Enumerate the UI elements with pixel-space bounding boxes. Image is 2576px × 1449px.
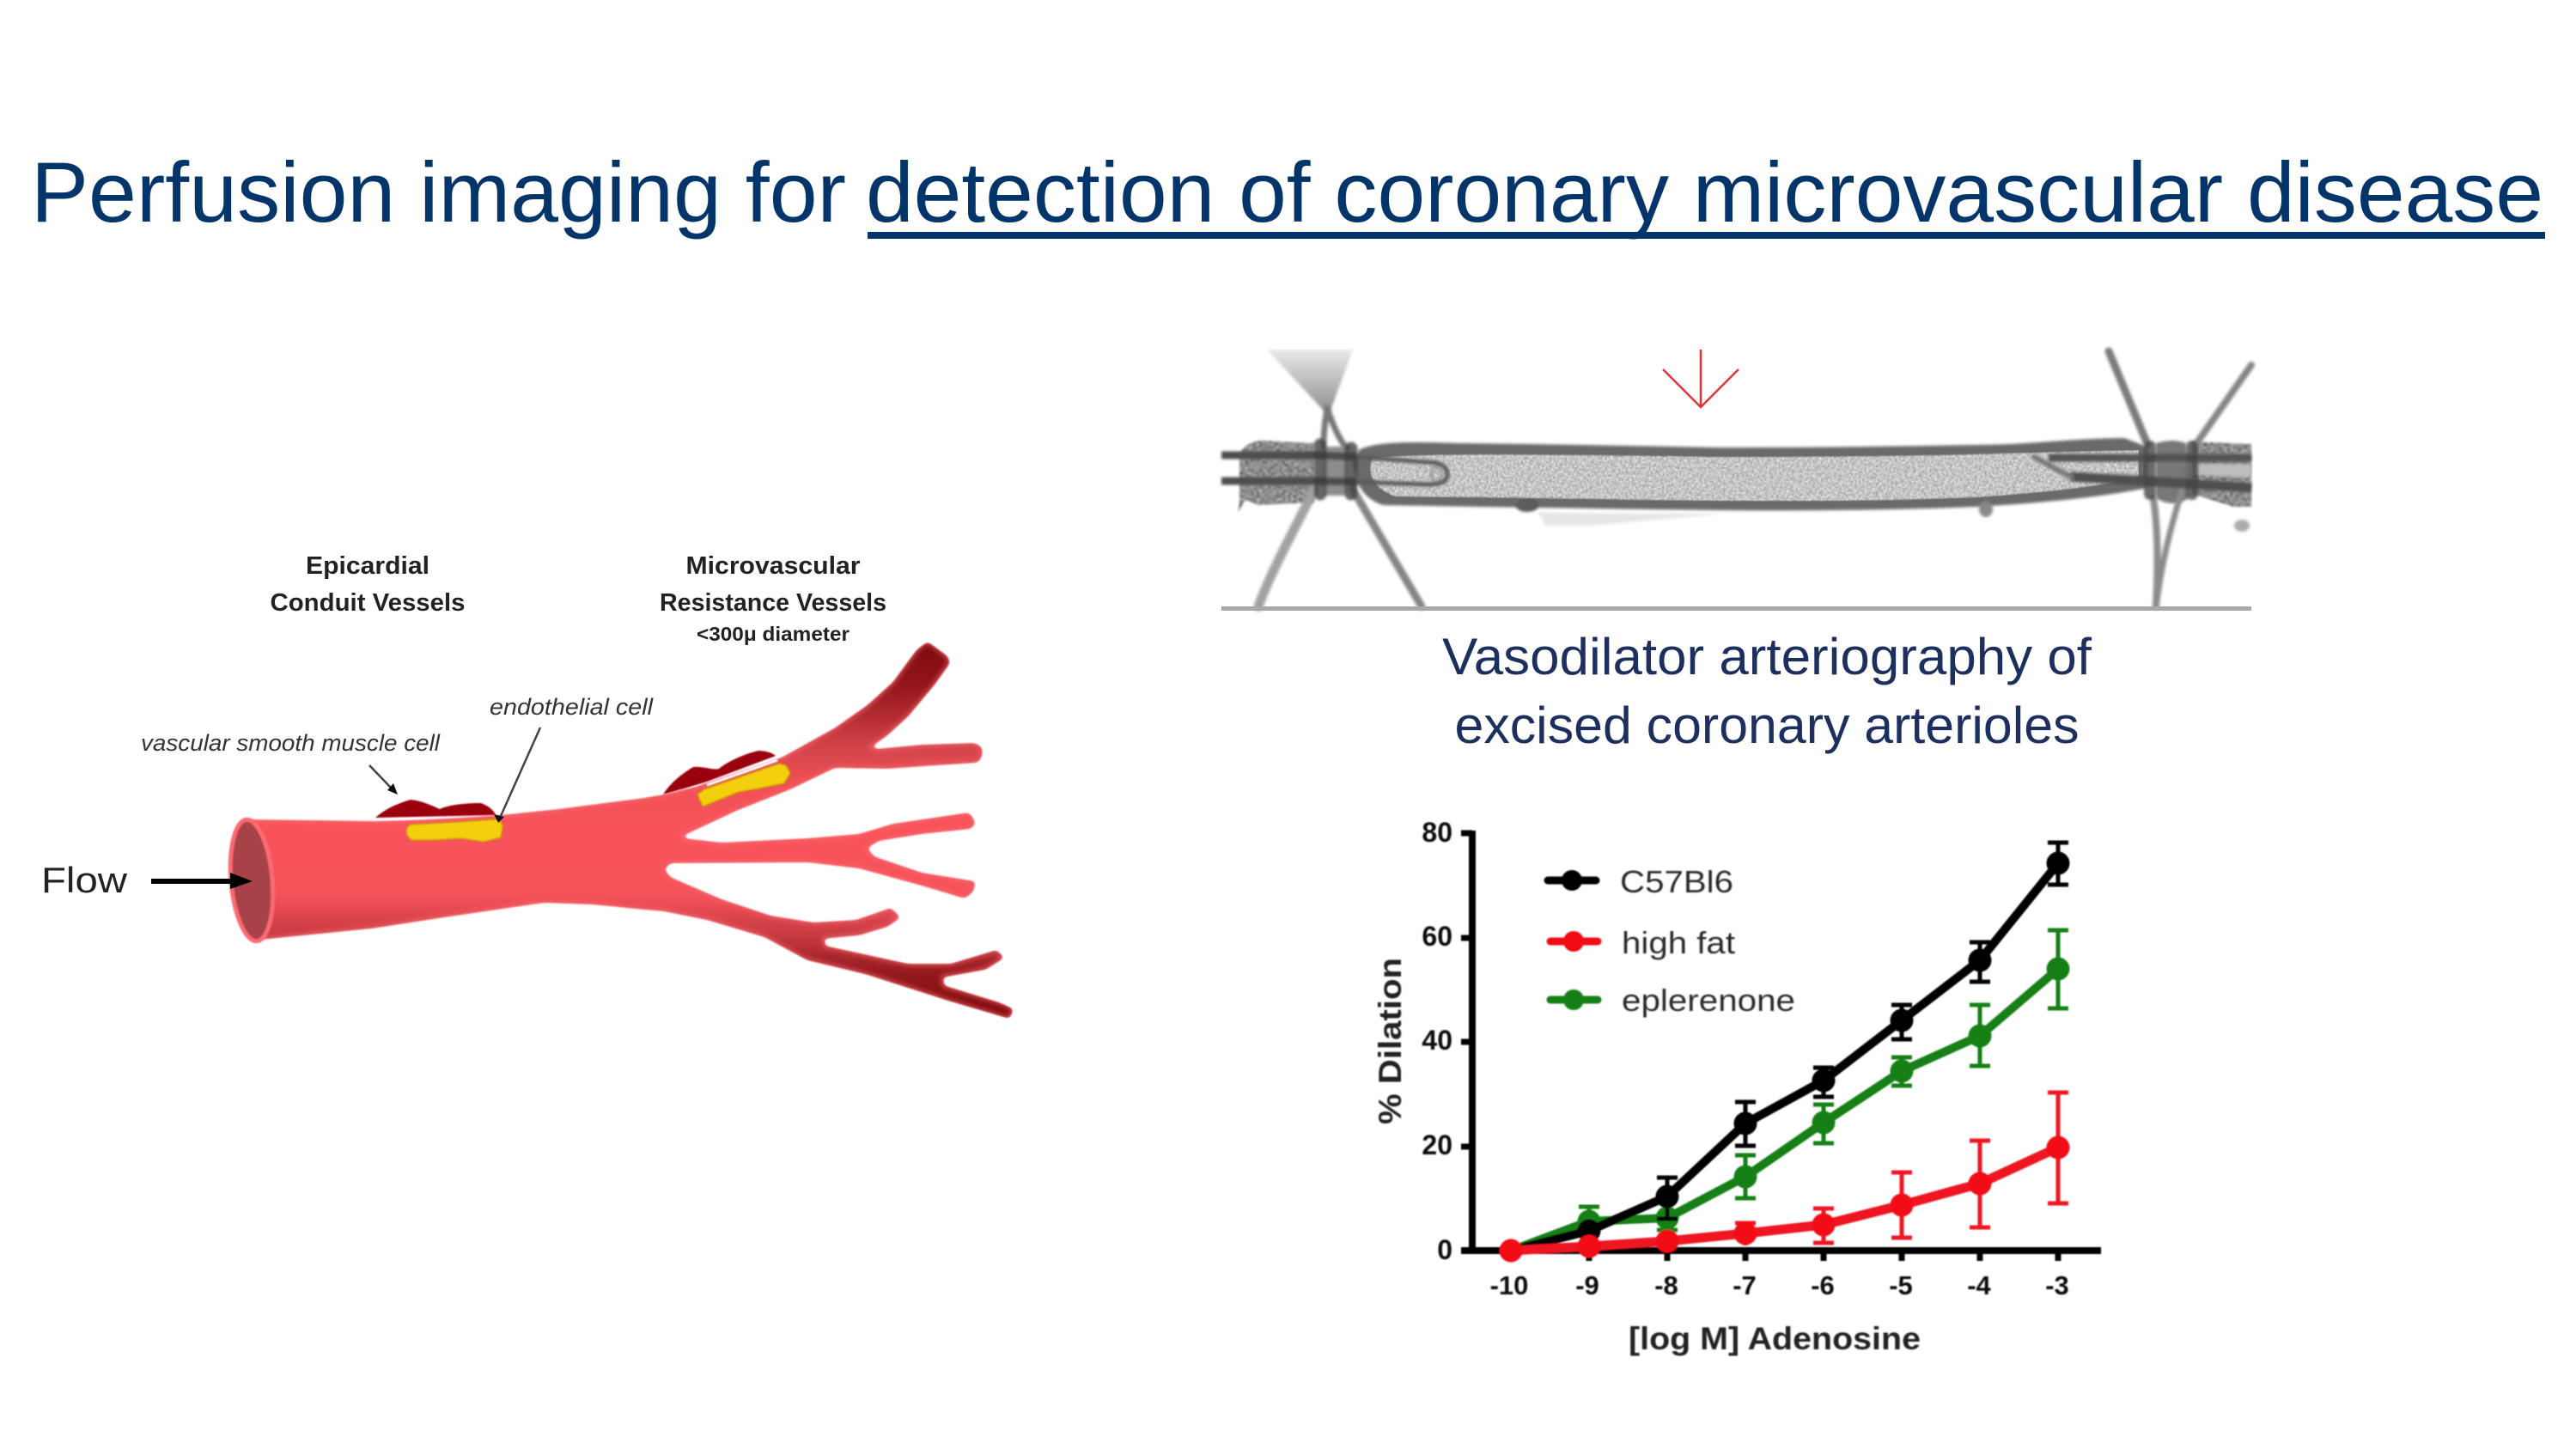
label: microvascular resistance vessels: <300μ diameter xyxy=(697,623,850,645)
vessel illustration xyxy=(226,642,1013,1018)
y tick labels: 80 xyxy=(1422,817,1452,848)
title: detection of coronary microvascular disease xyxy=(866,144,2543,240)
y tick labels: 40 xyxy=(1422,1025,1452,1056)
x tick labels: -4 xyxy=(1967,1270,1992,1300)
arrow: endothelial cell pointer xyxy=(494,728,540,823)
title: Perfusion imaging for xyxy=(31,144,846,240)
thread funnel xyxy=(1267,350,1353,411)
x tick labels: -7 xyxy=(1733,1270,1757,1300)
sutures and cannulas xyxy=(1221,351,2251,606)
label: epicardial conduit vessels: Epicardial xyxy=(306,552,429,580)
label: microvascular resistance vessels: Resistance Vessels xyxy=(660,589,886,617)
y axis title: % Dilation xyxy=(1373,958,1408,1124)
y tick labels: 0 xyxy=(1437,1234,1452,1265)
x axis title: [log M] Adenosine xyxy=(1629,1321,1921,1356)
vessel diagram xyxy=(41,552,1013,1018)
label: endothelial cell: endothelial cell xyxy=(490,694,654,720)
vessel mouth xyxy=(226,818,277,943)
series: eplerenone xyxy=(1511,930,2070,1251)
right cuff xyxy=(2192,441,2251,507)
x tick labels: -9 xyxy=(1575,1270,1599,1300)
x tick labels: -8 xyxy=(1654,1270,1678,1300)
label: epicardial conduit vessels xyxy=(270,552,466,617)
endothelial cell, conduit xyxy=(406,819,502,842)
series: C57Bl6 xyxy=(1511,843,2070,1251)
photo: excised arteriole xyxy=(1221,350,2251,611)
arterial tree xyxy=(245,642,1013,1018)
title xyxy=(31,144,2545,240)
smooth muscle cell, microvascular xyxy=(663,751,776,795)
label: epicardial conduit vessels: Conduit Vessels xyxy=(270,589,466,617)
label: flow: Flow xyxy=(41,860,128,900)
gap line above microvascular endothelium xyxy=(707,760,777,785)
y tick labels: 20 xyxy=(1422,1129,1452,1160)
endothelial cell, microvascular xyxy=(697,764,790,807)
lumen xyxy=(1370,450,2139,501)
caption: excised coronary arterioles xyxy=(1455,697,2079,754)
micrograph body xyxy=(1353,438,2250,532)
line chart xyxy=(1373,817,2101,1356)
legend: C57Bl6 xyxy=(1620,864,1733,899)
x tick labels: -3 xyxy=(2045,1270,2069,1300)
baseline bar xyxy=(1221,606,2251,611)
arrow: smooth muscle pointer xyxy=(369,765,398,795)
label: microvascular resistance vessels xyxy=(660,552,886,645)
series: high fat xyxy=(1500,1093,2070,1263)
label: vascular smooth muscle cell: vascular smooth muscle cell xyxy=(141,730,441,756)
caption xyxy=(1442,628,2092,754)
y tick labels xyxy=(1422,817,1452,1265)
x tick labels: -5 xyxy=(1889,1270,1913,1300)
arrow: flow xyxy=(151,873,253,889)
right lumen window xyxy=(2195,464,2251,478)
y tick labels: 60 xyxy=(1422,921,1452,952)
legend: eplerenone xyxy=(1622,983,1795,1018)
x tick labels: -6 xyxy=(1811,1270,1835,1300)
legend xyxy=(1548,864,1795,1018)
label: microvascular resistance vessels: Microvascular xyxy=(685,552,861,580)
smooth muscle cell, conduit xyxy=(375,800,496,818)
left cuff xyxy=(1238,441,1314,513)
arrow: red marker xyxy=(1663,350,1739,407)
axes xyxy=(1461,831,2101,1261)
x tick labels xyxy=(1490,1270,2069,1300)
caption: Vasodilator arteriography of xyxy=(1442,628,2092,685)
x tick labels: -10 xyxy=(1490,1270,1528,1300)
legend: high fat xyxy=(1622,925,1735,960)
